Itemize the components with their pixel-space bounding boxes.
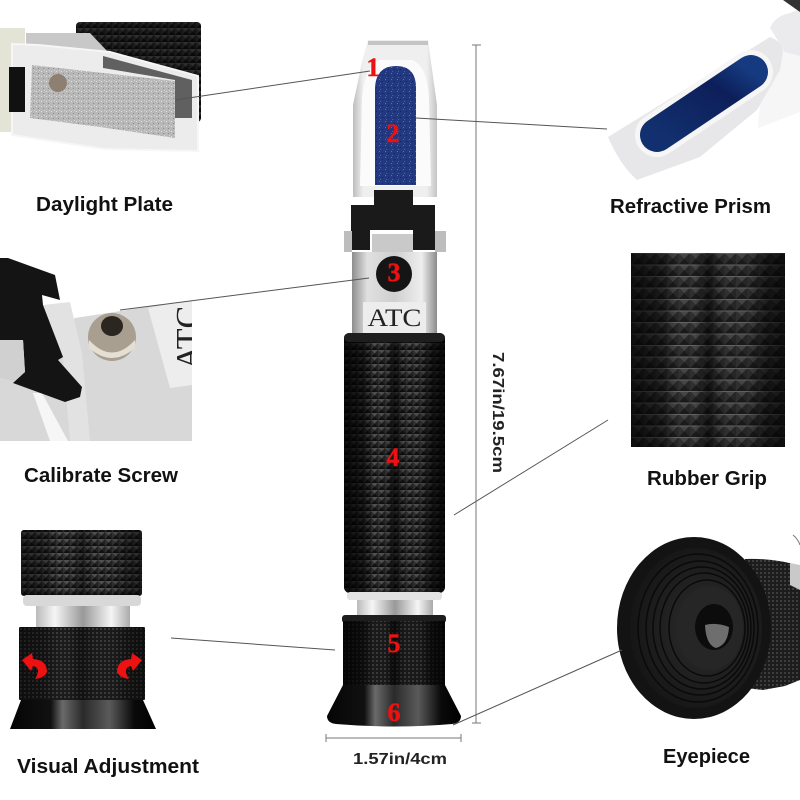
- photo: calibrate screw: [0, 258, 207, 441]
- lens: [695, 604, 733, 650]
- glass cover: [353, 40, 437, 197]
- main refractometer: [327, 40, 461, 726]
- label: calibrate screw: Calibrate Screw: [24, 465, 178, 487]
- icon: black clip: [0, 258, 82, 402]
- label: refractive prism: Refractive Prism: [610, 196, 771, 218]
- dimension: height: 7.67in/19.5cm: [489, 352, 506, 473]
- eyecup cone: [327, 685, 461, 726]
- silver collar: [344, 231, 446, 252]
- ATC label: ATC: [368, 305, 422, 332]
- photo: rubber grip: [631, 253, 785, 447]
- part numbers: 1: [366, 53, 380, 82]
- dimension: width: 1.57in/4cm: [353, 751, 447, 768]
- blue window: [657, 72, 751, 135]
- label: daylight plate: Daylight Plate: [36, 194, 173, 216]
- body: [745, 559, 800, 690]
- knurled grip: [344, 333, 445, 593]
- ATC label: [363, 302, 426, 333]
- label: eyepiece: Eyepiece: [663, 746, 750, 768]
- label: visual adjustment: Visual Adjustment: [17, 756, 199, 778]
- rotated ATC print: ATC: [170, 306, 207, 370]
- blue prism: [375, 66, 416, 185]
- part numbers: 5: [388, 629, 400, 658]
- part numbers: 6: [388, 698, 400, 727]
- icon: left red arrow: [22, 653, 47, 679]
- screw button: [376, 256, 412, 292]
- rubber eyecup: [617, 537, 771, 719]
- leader lines: [120, 71, 622, 725]
- focus ring: [342, 615, 446, 686]
- silver body: [352, 252, 437, 334]
- black clip: [351, 190, 435, 250]
- tube: [758, 48, 800, 128]
- plate: [608, 37, 783, 180]
- label: rubber grip: Rubber Grip: [647, 468, 767, 490]
- photo: refractive prism: [608, 0, 800, 180]
- photo: eyepiece: [617, 535, 800, 719]
- icon: right red arrow: [117, 653, 142, 679]
- part numbers: 4: [386, 443, 400, 472]
- part numbers: 2: [386, 119, 400, 148]
- dimension: width: [326, 734, 461, 768]
- part numbers: [366, 53, 400, 727]
- silver neck: [347, 592, 442, 616]
- photo: daylight plate: [0, 22, 201, 151]
- photo: visual adjustment: [10, 530, 156, 729]
- part numbers: 3: [388, 258, 400, 287]
- icon: knurled screw: [88, 313, 136, 361]
